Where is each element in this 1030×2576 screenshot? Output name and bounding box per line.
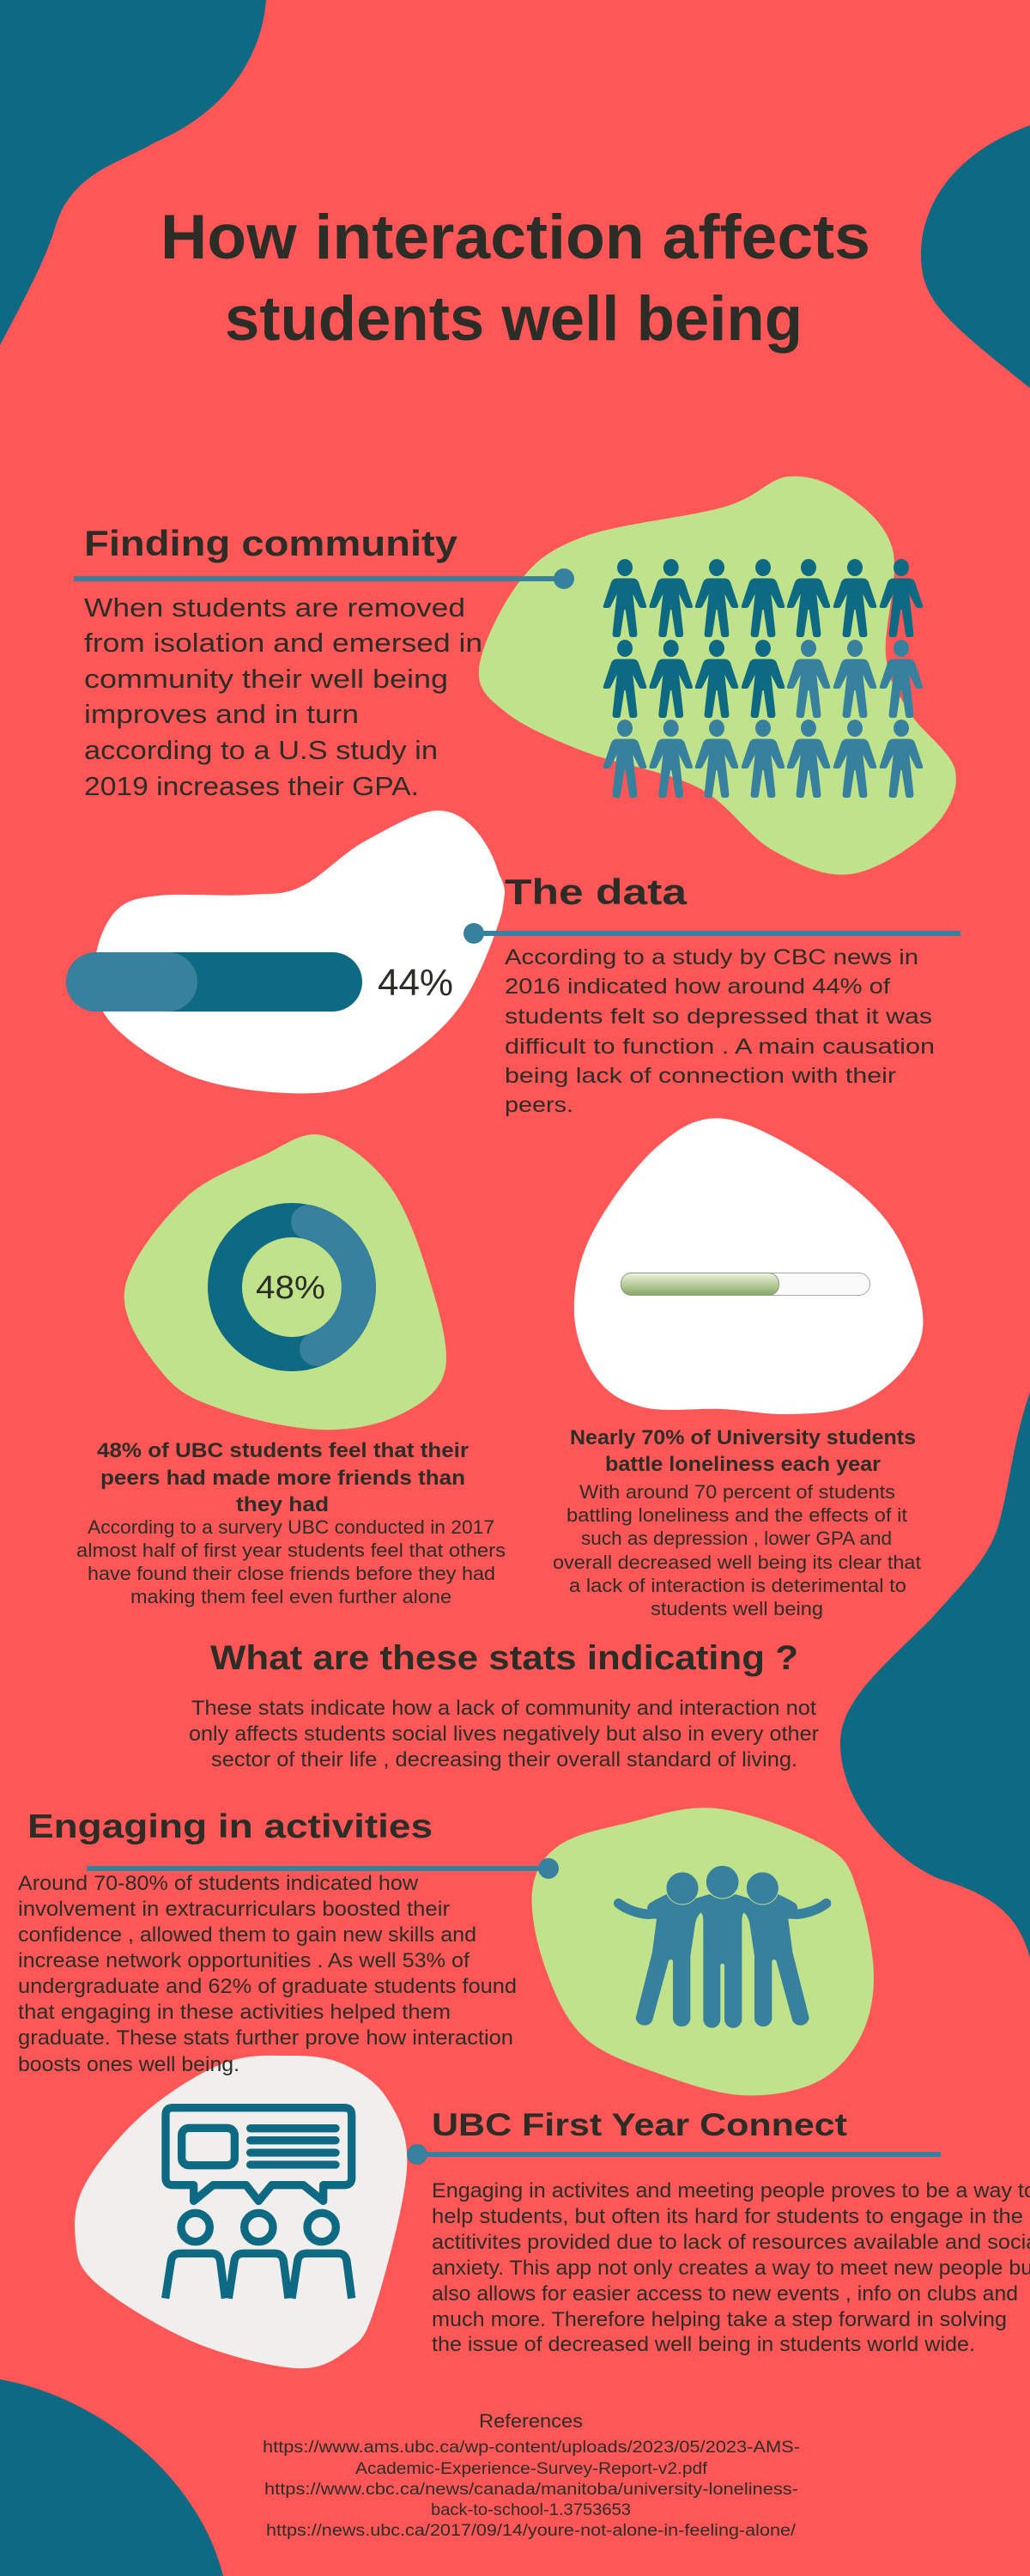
heading: peers had made more friends than bbox=[100, 1467, 465, 1490]
heading: What are these stats indicating ? bbox=[210, 1639, 798, 1677]
body text: students well being bbox=[651, 1598, 823, 1619]
body text: students felt so depressed that it was bbox=[505, 1005, 932, 1029]
icon: three friends bbox=[619, 1865, 827, 2028]
light blob bbox=[75, 2056, 407, 2368]
body text: from isolation and emersed in bbox=[84, 628, 482, 658]
body text: According to a survery UBC conducted in 2017 bbox=[88, 1516, 494, 1538]
body text bbox=[505, 945, 935, 1117]
icon: group discussion bbox=[166, 2108, 352, 2299]
panel: 48% of UBC students bbox=[76, 1134, 506, 1607]
body text: confidence , allowed them to gain new skills and bbox=[18, 1923, 476, 1947]
body text: the issue of decreased well being in students world wide. bbox=[432, 2333, 975, 2356]
body text: help students, but often its hard for students to engage in the bbox=[432, 2205, 1023, 2228]
references: References bbox=[479, 2410, 583, 2432]
people pictogram bbox=[603, 559, 923, 798]
body text: improves and in turn bbox=[84, 699, 359, 729]
heading: Nearly 70% of University students bbox=[570, 1426, 916, 1449]
heading: Engaging in activities bbox=[27, 1808, 433, 1845]
green blob bbox=[532, 1807, 874, 2095]
body text: Around 70-80% of students indicated how bbox=[18, 1872, 419, 1895]
heading bbox=[570, 1426, 916, 1476]
body text bbox=[553, 1481, 921, 1619]
body text: difficult to function . A main causation bbox=[505, 1035, 935, 1059]
body text: a lack of interaction is deterimental to bbox=[569, 1575, 906, 1596]
body text: only affects students social lives negatively but also in every other bbox=[189, 1722, 819, 1746]
overflow line from engaging text: boosts ones well being. bbox=[18, 2053, 239, 2076]
body text: battling loneliness and the effects of it bbox=[566, 1504, 907, 1526]
white blob bbox=[95, 811, 505, 1093]
body text: overall decreased well being its clear that bbox=[553, 1552, 921, 1573]
body text bbox=[18, 1872, 517, 2050]
body text: much more. Therefore helping take a step forward in solving bbox=[432, 2308, 1007, 2331]
body text: that engaging in these activities helped them bbox=[18, 2001, 451, 2024]
body text: actitivites provided due to lack of resources available and social bbox=[432, 2231, 1030, 2254]
bar chart: 44% bbox=[66, 952, 453, 1012]
body text bbox=[189, 1697, 819, 1771]
body text: 2016 indicated how around 44% of bbox=[505, 975, 890, 999]
references: https://www.cbc.ca/news/canada/manitoba/university-loneliness- bbox=[264, 2481, 798, 2499]
body text: almost half of first year students feel that others bbox=[76, 1540, 506, 1561]
green blob bbox=[124, 1134, 446, 1430]
title bbox=[161, 203, 870, 354]
body text bbox=[84, 592, 482, 801]
body text: according to a U.S study in bbox=[84, 735, 438, 765]
decorative blob: right middle bbox=[840, 1392, 1030, 1958]
body text: When students are removed bbox=[84, 592, 465, 623]
body text: According to a study by CBC news in bbox=[505, 945, 918, 969]
references: back-to-school-1.3753653 bbox=[431, 2501, 631, 2519]
donut chart: 48%: 48% bbox=[256, 1270, 325, 1306]
connector bbox=[464, 923, 960, 944]
connector bbox=[74, 568, 574, 589]
body text bbox=[76, 1516, 506, 1607]
body text: community their well being bbox=[84, 664, 448, 694]
body text: graduate. These stats further prove how interaction bbox=[18, 2026, 513, 2050]
heading: The data bbox=[505, 872, 688, 912]
references: https://news.ubc.ca/2017/09/14/youre-not-alone-in-feeling-alone/ bbox=[266, 2522, 797, 2540]
body text: peers. bbox=[505, 1093, 573, 1117]
panel: finding community bbox=[74, 477, 956, 875]
heading: battle loneliness each year bbox=[605, 1453, 881, 1476]
body text: involvement in extracurriculars boosted their bbox=[18, 1898, 450, 1921]
progress bar bbox=[621, 1273, 870, 1295]
body text: undergraduate and 62% of graduate students found bbox=[18, 1975, 517, 1998]
green blob with people bbox=[479, 477, 956, 875]
panel: 70% loneliness bbox=[553, 1118, 923, 1619]
references: Academic-Experience-Survey-Report-v2.pdf bbox=[355, 2460, 708, 2478]
body text: These stats indicate how a lack of community and interaction not bbox=[191, 1697, 816, 1720]
body text: With around 70 percent of students bbox=[579, 1481, 895, 1503]
white blob bbox=[574, 1118, 923, 1414]
body text: also allows for easier access to new events , info on clubs and bbox=[432, 2282, 1018, 2306]
heading: UBC First Year Connect bbox=[432, 2107, 847, 2142]
body text: 2019 increases their GPA. bbox=[84, 771, 419, 801]
body text: Engaging in activites and meeting people proves to be a way to bbox=[432, 2179, 1030, 2202]
panel: what are these stats indicating bbox=[189, 1639, 819, 1771]
references: https://www.ams.ubc.ca/wp-content/uploads/2023/05/2023-AMS- bbox=[263, 2439, 800, 2457]
body text: have found their close friends before they had bbox=[88, 1563, 495, 1584]
panel: engaging in activities bbox=[18, 1807, 874, 2095]
body text: increase network opportunities . As well 53% of bbox=[18, 1949, 470, 1972]
body text: such as depression , lower GPA and bbox=[581, 1528, 892, 1549]
connector bbox=[87, 1858, 559, 1879]
decorative blob: bottom left bbox=[0, 2379, 223, 2576]
heading: they had bbox=[236, 1493, 329, 1516]
decorative blob: top left bbox=[0, 0, 266, 345]
title: students well being bbox=[225, 284, 803, 354]
panel: the data bbox=[66, 811, 960, 1117]
body text: sector of their life , decreasing their overall standard of living. bbox=[211, 1748, 797, 1771]
body text bbox=[432, 2179, 1030, 2356]
bar chart: 44%: 44% bbox=[378, 962, 453, 1004]
panel: UBC First Year Connect bbox=[18, 2053, 1030, 2368]
body text: making them feel even further alone bbox=[130, 1586, 451, 1607]
heading: Finding community bbox=[84, 523, 458, 563]
title: How interaction affects bbox=[161, 203, 870, 272]
connector bbox=[407, 2144, 941, 2165]
decorative blob: top right bbox=[921, 125, 1030, 388]
references bbox=[263, 2410, 800, 2540]
donut chart: 48% bbox=[225, 1220, 359, 1354]
body text: being lack of connection with their bbox=[505, 1064, 896, 1088]
heading: 48% of UBC students feel that their bbox=[97, 1439, 469, 1462]
heading bbox=[97, 1439, 469, 1516]
body text: anxiety. This app not only creates a way to meet new people but bbox=[432, 2257, 1030, 2280]
